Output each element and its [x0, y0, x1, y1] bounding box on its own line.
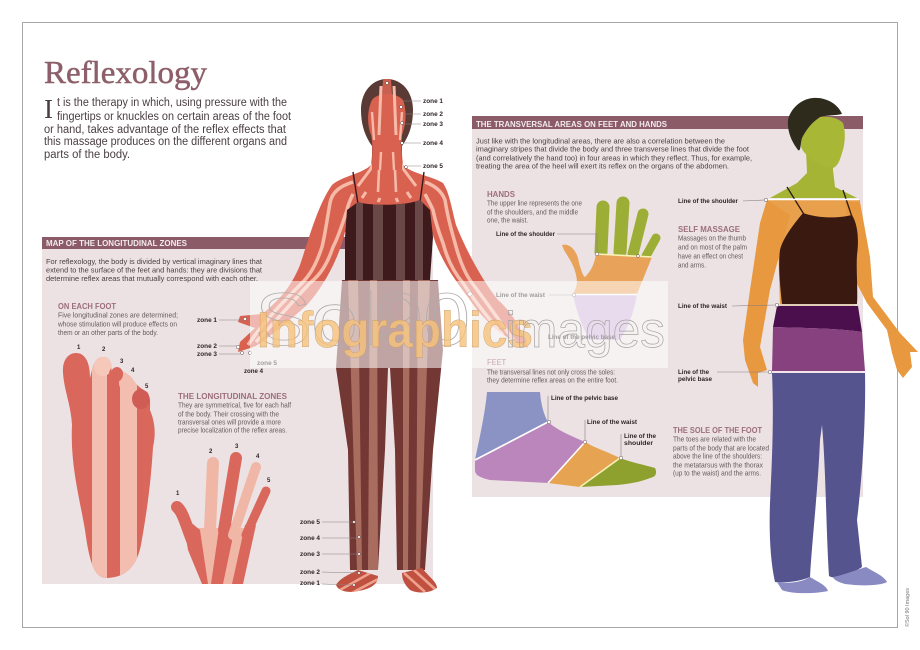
- text: the longitudinal zones: precise localization of the reflex areas.: [178, 428, 287, 434]
- blue pants: [770, 373, 865, 582]
- intro paragraph: fingertips or knuckles on certain areas of the foot: [57, 111, 292, 123]
- text: the sole of the foot: The toes are related with the: [673, 436, 756, 444]
- foot zone labels: zone 1: [300, 581, 321, 587]
- text: self massage: and on most of the palm: [678, 244, 747, 252]
- text: hands: The upper line represents the one: [487, 200, 582, 208]
- label: figure line of the shoulder: [678, 199, 764, 205]
- hand zone labels: zone 4: [244, 369, 264, 375]
- head zone labels: zone 1: [423, 99, 444, 105]
- text: the sole of the foot: parts of the body that are located: [673, 446, 769, 452]
- text: the longitudinal zones: of the body. Their crossing with the: [178, 412, 279, 418]
- text: feet: they determine reflex areas on the entire foot.: [487, 378, 618, 384]
- arms and shoulders: [238, 156, 528, 352]
- title: Reflexology: [44, 54, 207, 90]
- pants: [336, 280, 443, 570]
- text: the sole of the foot: (up to the waist) and the arms.: [673, 470, 761, 478]
- panel header: MAP OF THE LONGITUDINAL ZONES: [46, 239, 188, 248]
- text: hands: of the shoulders, and the middle: [487, 210, 578, 216]
- panel: map of the longitudinal zones: [42, 237, 433, 584]
- label: foot line of the waist: [585, 420, 637, 440]
- text: hands: [487, 189, 582, 224]
- foot zone numbers: 5: [145, 384, 149, 390]
- head zone labels: [402, 99, 444, 170]
- text: self massage: and arms.: [678, 262, 706, 270]
- foot zone numbers: 4: [131, 368, 135, 374]
- hand zone numbers: 4: [256, 454, 260, 460]
- watermark: [250, 278, 668, 368]
- head and neck: [361, 79, 413, 170]
- text: the longitudinal zones: transversal ones will provide a more: [178, 420, 281, 426]
- straps: [353, 172, 424, 204]
- hair: [788, 98, 842, 150]
- foot zone labels: zone 3: [300, 552, 321, 558]
- panel intro text: [46, 257, 262, 283]
- text: feet: [487, 357, 618, 384]
- label: figure line of the waist: [678, 304, 775, 310]
- waist band: [773, 306, 862, 332]
- panel intro text: extend to the surface of the feet and hands: they are divisions that: [46, 266, 262, 274]
- panel intro text: (and correlatively the hand too) in four areas in which they reflect. Thus, for example,: [476, 154, 752, 162]
- text: self massage: SELF MASSAGE: [678, 224, 740, 234]
- text: feet: FEET: [487, 357, 507, 367]
- label: foot line of the pelvic base: [548, 396, 619, 420]
- intro paragraph: [44, 94, 292, 161]
- foot zone numbers: 1: [77, 345, 81, 351]
- label: hand line of the waist: [496, 293, 576, 299]
- watermark: images: [505, 302, 665, 358]
- foot zone numbers: 3: [120, 359, 124, 365]
- intro paragraph: or hand, takes advantage of the reflex effects that: [44, 124, 287, 136]
- label: hand line of the pelvic base: Line of the pelvic base: [548, 335, 616, 341]
- text: on each foot: ON EACH FOOT: [58, 301, 117, 311]
- text: the sole of the foot: above the line of the shoulders:: [673, 454, 762, 460]
- label: hand line of the shoulder: Line of the shoulder: [496, 232, 556, 238]
- text: the sole of the foot: the metatarsus with the thorax: [673, 462, 763, 470]
- foot zone labels: zone 4: [300, 536, 321, 542]
- panel intro text: Just like with the longitudinal areas, there are also a correlation between the: [476, 136, 725, 146]
- copyright credit: ©Sol 90 Images: [904, 588, 911, 627]
- head zone labels: zone 5: [423, 164, 444, 170]
- right arm: [845, 202, 918, 378]
- head zone labels: zone 4: [423, 141, 444, 147]
- foot with transversal areas: [475, 392, 656, 487]
- hand zone numbers: 5: [267, 478, 271, 484]
- watermark: Infographics: [257, 302, 533, 358]
- feet: [336, 568, 437, 592]
- foot zone labels: [300, 520, 358, 587]
- right figure with transversal areas: [743, 98, 918, 593]
- foot zone numbers: 2: [102, 347, 106, 353]
- zone markers on the center figure: [236, 82, 472, 586]
- hand zone numbers: 3: [235, 444, 239, 450]
- text: on each foot: [57, 301, 178, 337]
- text: the sole of the foot: THE SOLE OF THE FOOT: [673, 425, 763, 435]
- hand zone labels: zone 5: [257, 361, 278, 367]
- label: figure line of the pelvic base: [678, 370, 768, 383]
- label: figure line of the pelvic base: Line of the: [678, 370, 710, 376]
- feet: [777, 567, 887, 593]
- watermark: Sol90: [255, 278, 470, 361]
- intro paragraph: parts of the body.: [44, 149, 130, 161]
- hand with five zones: [176, 444, 271, 584]
- text: hands: one, the waist.: [487, 218, 528, 224]
- text: on each foot: Five longitudinal zones are determined;: [58, 312, 178, 320]
- foot zone numbers: [77, 345, 149, 390]
- panel intro text: determine reflex areas that mutually correspond with each other.: [46, 274, 258, 283]
- face: [800, 117, 845, 168]
- text: the longitudinal zones: They are symmetrical, five for each half: [178, 402, 291, 410]
- label: foot line of the waist: Line of the waist: [587, 420, 637, 426]
- head zone labels: zone 3: [423, 122, 444, 128]
- hand with transversal areas: [562, 203, 656, 340]
- label: figure line of the pelvic base: pelvic base: [678, 377, 713, 383]
- text: hands: HANDS: [487, 189, 515, 199]
- label: figure line of the waist: Line of the waist: [678, 304, 727, 310]
- panel: transversal areas: [472, 116, 863, 497]
- tank top: [345, 200, 433, 280]
- hand zone labels: [197, 318, 278, 375]
- text: the longitudinal zones: THE LONGITUDINAL ZONES: [178, 391, 287, 401]
- panel header: THE TRANSVERSAL AREAS ON FEET AND HANDS: [476, 120, 668, 129]
- panel intro text: [476, 136, 752, 170]
- center figure with longitudinal zones: [230, 75, 540, 598]
- panel header: [42, 237, 347, 249]
- text: the sole of the foot: [673, 425, 769, 478]
- neck and shoulders: [770, 150, 857, 198]
- intro paragraph: I: [44, 94, 53, 124]
- hand zone labels: zone 1: [197, 318, 218, 324]
- tank top: [779, 213, 858, 304]
- text: self massage: [678, 224, 747, 270]
- straps: [787, 187, 852, 217]
- hand zone numbers: 2: [209, 449, 213, 455]
- head zone labels: zone 2: [423, 112, 444, 118]
- purple hips: [772, 327, 865, 371]
- foot sole with five zones: [60, 345, 160, 582]
- text: the longitudinal zones: [178, 391, 291, 434]
- text: on each foot: them or an other parts of the body.: [58, 330, 158, 337]
- label: figure line of the shoulder: Line of the shoulder: [678, 199, 739, 205]
- label: foot line of the shoulder: shoulder: [624, 441, 654, 447]
- label: foot line of the shoulder: Line of the: [624, 434, 657, 440]
- hand zone labels: zone 3: [197, 352, 218, 358]
- label: foot line of the pelvic base: Line of the pelvic base: [551, 396, 619, 402]
- panel intro text: imaginary stripes that divide the body and three transverse lines that divide the foot: [476, 144, 749, 154]
- left arm: [743, 200, 790, 387]
- text: self massage: Massages on the thumb: [678, 236, 746, 242]
- foot zone labels: zone 5: [300, 520, 321, 526]
- text: feet: The transversal lines not only cross the soles:: [487, 370, 615, 376]
- hand zone labels: zone 2: [197, 344, 218, 350]
- transversal lines: [767, 200, 866, 372]
- torso skin: [767, 200, 860, 310]
- hand zone numbers: 1: [176, 491, 180, 497]
- label: hand line of the shoulder: [496, 232, 597, 252]
- label: hand line of the waist: Line of the waist: [496, 293, 545, 299]
- label: foot line of the shoulder: [621, 434, 657, 456]
- hand zone numbers: [176, 444, 271, 497]
- text: on each foot: whose stimulation will produce effects on: [57, 322, 177, 328]
- panel intro text: treating the area of the heel will exert its reflex on the organs of the abdomen.: [476, 162, 729, 170]
- intro paragraph: this massage produces on the different organs and: [44, 136, 287, 148]
- panel header: [472, 116, 863, 129]
- foot zone labels: zone 2: [300, 570, 321, 576]
- text: self massage: have an effect on chest: [678, 254, 743, 260]
- panel intro text: For reflexology, the body is divided by vertical imaginary lines that: [46, 257, 262, 266]
- intro paragraph: t is the therapy in which, using pressure with the: [57, 97, 287, 109]
